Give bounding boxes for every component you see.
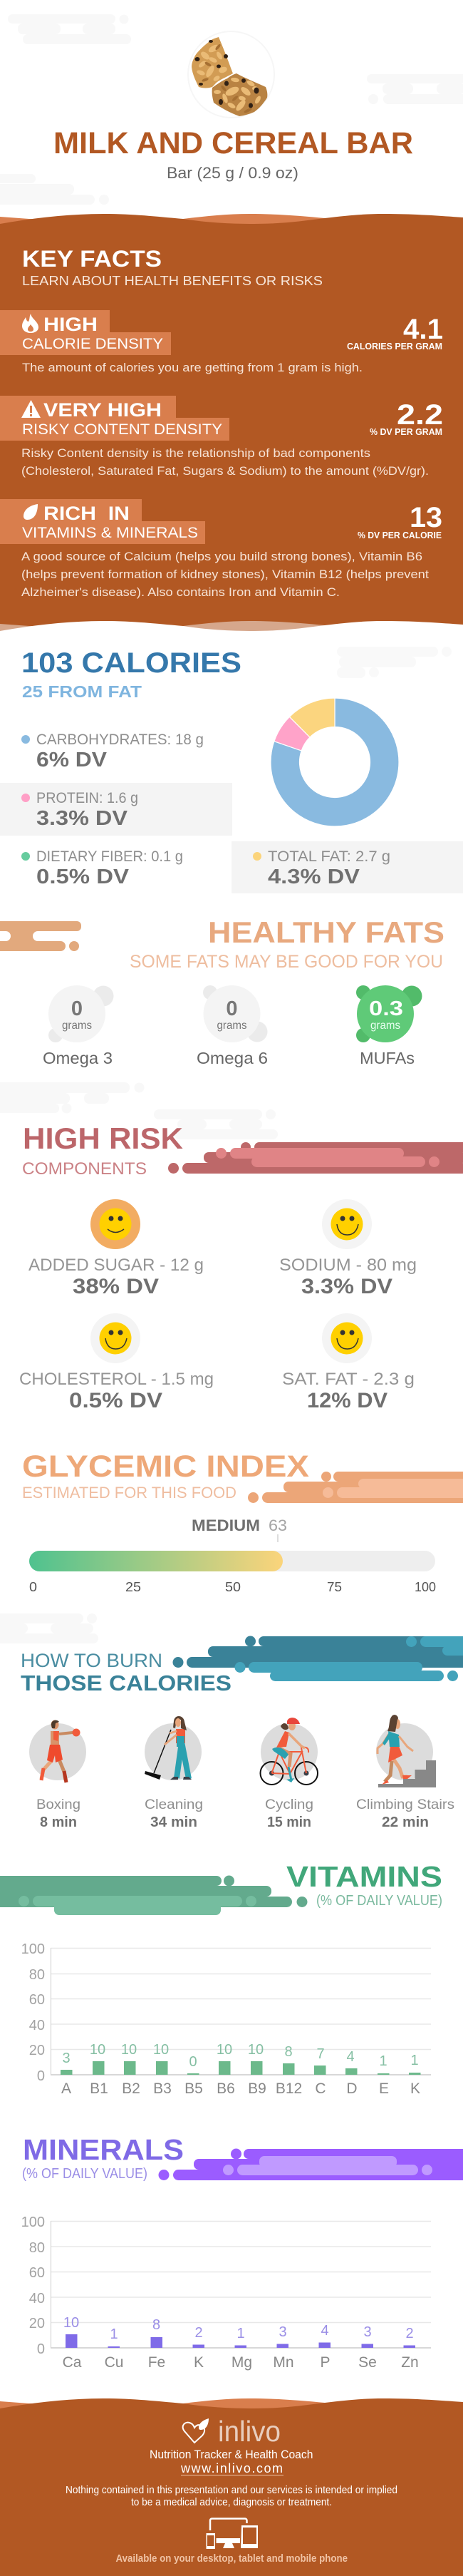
macro: dietary fiber xyxy=(21,848,183,888)
bar chart: vitamins: 60 xyxy=(29,1992,45,2008)
bar chart: vitamins: 0 xyxy=(37,2068,45,2084)
macro: dietary fiber: DIETARY FIBER: 0.1 g xyxy=(36,848,183,865)
serving size: Bar (25 g / 0.9 oz) xyxy=(167,164,298,182)
risk: sodium: 3.3% DV xyxy=(301,1275,392,1298)
heading: HIGH RISK xyxy=(23,1122,183,1155)
activity labels: Climbing Stairs xyxy=(356,1797,454,1812)
bar chart: minerals: 3 xyxy=(279,2324,287,2340)
bar chart: minerals: P xyxy=(320,2354,331,2371)
logo wordmark: inlivo xyxy=(218,2415,281,2448)
panel: healthy fats xyxy=(0,915,444,1067)
bar chart: minerals: Cu xyxy=(105,2354,123,2371)
heading line two: THOSE CALORIES xyxy=(21,1671,232,1695)
mufas: MUFAs xyxy=(360,1049,415,1067)
bar chart: minerals: 2 xyxy=(194,2325,203,2341)
risk: added sugar: 38% DV xyxy=(73,1275,159,1298)
risk: cholesterol: CHOLESTEROL - 1.5 mg xyxy=(19,1370,214,1389)
subheading: (% OF DAILY VALUE) xyxy=(22,2166,147,2182)
bar chart: minerals: 80 xyxy=(29,2240,45,2256)
subheading: ESTIMATED FOR THIS FOOD xyxy=(22,1484,236,1502)
subheading: (% OF DAILY VALUE) xyxy=(316,1893,442,1909)
bar chart: vitamins: 80 xyxy=(29,1967,45,1983)
bar chart: minerals: 1 xyxy=(236,2326,245,2341)
omega 3: grams xyxy=(62,1020,92,1032)
food image xyxy=(188,31,274,118)
bar chart: minerals: 20 xyxy=(29,2316,45,2331)
bar chart: vitamins: 100 xyxy=(21,1941,45,1957)
bar chart: vitamins: 10 xyxy=(121,2042,137,2058)
availability note: Available on your desktop, tablet and mobile phone xyxy=(115,2553,348,2565)
bar chart: vitamins: 10 xyxy=(248,2042,264,2058)
bar chart: vitamins: C xyxy=(315,2080,326,2097)
key facts subheading: LEARN ABOUT HEALTH BENEFITS OR RISKS xyxy=(22,274,323,288)
bar chart: vitamins: B12 xyxy=(276,2080,302,2097)
heading line one: HOW TO BURN xyxy=(21,1650,162,1671)
subheading: SOME FATS MAY BE GOOD FOR YOU xyxy=(130,952,443,972)
panel: calories xyxy=(0,647,463,893)
heading: GLYCEMIC INDEX xyxy=(22,1449,309,1484)
gauge bar xyxy=(29,1551,435,1571)
activity: cleaning xyxy=(145,1716,202,1780)
icon: leaf xyxy=(24,504,38,520)
risk: saturated fat: SAT. FAT - 2.3 g xyxy=(282,1370,415,1389)
bar chart: vitamins: 1 xyxy=(410,2053,419,2068)
bar chart: vitamins: E xyxy=(379,2080,389,2097)
omega 3 xyxy=(43,985,114,1067)
unit: calories per gram: CALORIES PER GRAM xyxy=(347,342,442,351)
bar chart: vitamins: 40 xyxy=(29,2018,45,2033)
macro: carbohydrates: CARBOHYDRATES: 18 g xyxy=(36,732,204,748)
bar chart: minerals: 40 xyxy=(29,2291,45,2306)
label: calorie density: CALORIE DENSITY xyxy=(22,336,163,352)
macro: protein: 3.3% DV xyxy=(36,807,128,830)
bar chart: vitamins: B5 xyxy=(184,2080,203,2097)
gauge label: MEDIUM xyxy=(192,1517,260,1534)
bar chart: minerals: Fe xyxy=(148,2354,165,2371)
bar chart: vitamins: B6 xyxy=(217,2080,235,2097)
activity durations: 34 min xyxy=(150,1815,197,1830)
macro: carbohydrates xyxy=(21,732,204,771)
label: rich in: RICH IN xyxy=(43,503,130,524)
heading: HEALTHY FATS xyxy=(208,915,444,949)
bar chart: vitamins: 7 xyxy=(316,2046,325,2062)
gauge scale: 100 xyxy=(415,1580,436,1594)
panel: how to burn xyxy=(21,1636,463,1830)
icon: flame xyxy=(22,314,38,333)
omega 3: 0 xyxy=(71,997,83,1020)
panel: glycemic index xyxy=(22,1449,463,1594)
gauge scale: 25 xyxy=(125,1580,141,1594)
risk: cholesterol xyxy=(19,1313,214,1412)
gauge scale xyxy=(29,1580,436,1594)
bar chart: vitamins: 1 xyxy=(379,2053,387,2069)
bar chart: vitamins: 3 xyxy=(62,2051,71,2066)
bar chart: vitamins: 10 xyxy=(90,2042,105,2058)
activity labels: Cycling xyxy=(265,1797,313,1812)
risk: added sugar xyxy=(28,1199,204,1298)
value: 13: 13 xyxy=(410,502,442,533)
activity: climbing stairs xyxy=(376,1715,436,1787)
omega 6: 0 xyxy=(226,997,238,1020)
omega 6 xyxy=(197,985,268,1067)
activity durations: 8 min xyxy=(40,1815,77,1830)
disclaimer xyxy=(66,2485,397,2508)
bar chart: minerals: Zn xyxy=(401,2354,419,2371)
description xyxy=(21,550,429,599)
risk: sodium xyxy=(279,1199,417,1298)
activity labels: Cleaning xyxy=(145,1797,203,1812)
bar chart: minerals: Mg xyxy=(232,2354,252,2371)
risk: saturated fat: 12% DV xyxy=(307,1389,387,1412)
bar chart: minerals: 8 xyxy=(152,2317,160,2333)
omega 3: Omega 3 xyxy=(43,1049,113,1067)
bar chart: vitamins: B1 xyxy=(90,2080,108,2097)
decorative bars xyxy=(0,1875,308,1915)
heading: MINERALS xyxy=(23,2133,184,2166)
bar chart: minerals: 100 xyxy=(21,2215,45,2230)
panel: key facts xyxy=(0,214,463,642)
macro: total fat xyxy=(232,841,463,893)
bar chart: minerals: Ca xyxy=(63,2354,82,2371)
value: 2.2: 2.2 xyxy=(397,399,443,431)
label: vitamins and minerals: VITAMINS & MINERALS xyxy=(22,525,198,541)
tagline: Nutrition Tracker & Health Coach xyxy=(150,2448,313,2461)
icon: warning triangle xyxy=(21,400,41,418)
description xyxy=(21,446,429,478)
gauge scale: 0 xyxy=(29,1580,37,1594)
bar chart: minerals xyxy=(21,2215,431,2371)
risk: added sugar: ADDED SUGAR - 12 g xyxy=(28,1256,204,1275)
gauge scale: 75 xyxy=(327,1580,342,1594)
bar chart: vitamins xyxy=(21,1941,431,2097)
bar chart: vitamins: 20 xyxy=(29,2043,45,2058)
activity labels xyxy=(36,1797,454,1812)
unit: % dv per calorie: % DV PER CALORIE xyxy=(358,530,442,540)
icon: devices xyxy=(207,2518,258,2549)
activity labels: Boxing xyxy=(36,1797,80,1812)
bar chart: vitamins: B2 xyxy=(122,2080,140,2097)
logo mark xyxy=(183,2418,209,2443)
activity: boxing xyxy=(29,1720,86,1782)
calories from fat: 25 FROM FAT xyxy=(22,682,142,701)
label: high: HIGH xyxy=(43,314,98,335)
mufas xyxy=(356,985,422,1067)
macro: total fat: 4.3% DV xyxy=(268,866,360,888)
panel: vitamins xyxy=(0,1860,442,2097)
bar chart: minerals: 10 xyxy=(63,2315,79,2331)
omega 6: grams xyxy=(217,1020,246,1032)
risk: saturated fat xyxy=(282,1313,415,1412)
fact: vitamins and minerals xyxy=(0,499,442,599)
macro: protein xyxy=(0,783,232,836)
bar chart: minerals: 3 xyxy=(363,2324,372,2340)
mufas: 0.3 xyxy=(369,997,403,1020)
website link: www.inlivo.com xyxy=(180,2461,283,2475)
description: Alzheimer's disease). Also contains Iron and Vitamin C. xyxy=(21,585,340,599)
bar chart: vitamins: B9 xyxy=(248,2080,266,2097)
mufas: grams xyxy=(370,1020,400,1032)
bar chart: vitamins: 10 xyxy=(217,2042,232,2058)
macro: total fat: TOTAL FAT: 2.7 g xyxy=(268,848,390,865)
bar chart: vitamins: A xyxy=(61,2080,71,2097)
bar chart: vitamins: 10 xyxy=(153,2042,169,2058)
panel: high risk components xyxy=(19,1122,463,1412)
description: A good source of Calcium (helps you build strong bones), Vitamin B6 xyxy=(21,550,422,563)
donut chart xyxy=(271,698,399,826)
decorative bars xyxy=(168,1142,463,1174)
bar chart: minerals: Mn xyxy=(273,2354,294,2371)
calories heading: 103 CALORIES xyxy=(21,647,241,679)
bar chart: minerals: 2 xyxy=(405,2326,414,2341)
bar chart: minerals: 4 xyxy=(321,2323,329,2339)
heading: VITAMINS xyxy=(286,1860,442,1893)
activity durations xyxy=(40,1815,429,1830)
decorative bars xyxy=(0,921,81,951)
title: MILK AND CEREAL BAR xyxy=(53,126,413,160)
macro: dietary fiber: 0.5% DV xyxy=(36,866,130,888)
label: very high: VERY HIGH xyxy=(43,399,162,421)
key facts heading: KEY FACTS xyxy=(22,246,162,272)
activity durations: 22 min xyxy=(382,1815,429,1830)
macro: protein: PROTEIN: 1.6 g xyxy=(36,790,138,806)
bar chart: minerals: 60 xyxy=(29,2265,45,2281)
description: Risky Content density is the relationship of bad components xyxy=(21,446,370,460)
unit: % dv per gram: % DV PER GRAM xyxy=(370,427,442,437)
panel: minerals xyxy=(21,2133,463,2371)
description: (helps prevent formation of kidney stones), Vitamin B12 (helps prevent xyxy=(21,568,429,581)
activity durations: 15 min xyxy=(267,1815,311,1830)
disclaimer: to be a medical advice, diagnosis or treatment. xyxy=(131,2497,332,2508)
disclaimer: Nothing contained in this presentation and our services is intended or implied xyxy=(66,2485,397,2496)
value: 4.1: 4.1 xyxy=(403,314,443,345)
label: risky content density: RISKY CONTENT DENSITY xyxy=(22,421,222,438)
macro: carbohydrates: 6% DV xyxy=(36,749,108,771)
description: The amount of calories you are getting from 1 gram is high. xyxy=(22,361,363,374)
bar chart: vitamins: B3 xyxy=(153,2080,172,2097)
bar chart: minerals: Se xyxy=(358,2354,377,2371)
activity: cycling xyxy=(261,1718,318,1785)
fact: calorie density xyxy=(0,310,443,374)
risk: sodium: SODIUM - 80 mg xyxy=(279,1256,417,1275)
fact: risky content density xyxy=(0,396,443,478)
bar chart: minerals: 1 xyxy=(110,2326,118,2342)
bar chart: vitamins: 4 xyxy=(346,2049,355,2065)
omega 6: Omega 6 xyxy=(197,1049,268,1067)
gauge scale: 50 xyxy=(225,1580,241,1594)
bar chart: vitamins: 0 xyxy=(189,2054,197,2070)
bar chart: vitamins: 8 xyxy=(284,2044,293,2060)
bar chart: vitamins: K xyxy=(410,2080,420,2097)
subheading: COMPONENTS xyxy=(22,1159,147,1179)
decorative bars xyxy=(248,1472,463,1503)
bar chart: vitamins: D xyxy=(346,2080,358,2097)
bar chart: minerals: 0 xyxy=(37,2341,45,2357)
bar chart: minerals: K xyxy=(194,2354,204,2371)
decorative bars xyxy=(158,2149,463,2180)
description: (Cholesterol, Saturated Fat, Sugars & Sodium) to the amount (%DV/gr). xyxy=(21,464,429,478)
panel: footer xyxy=(0,2398,463,2576)
risk: cholesterol: 0.5% DV xyxy=(69,1389,162,1412)
gauge value: 63 xyxy=(269,1517,287,1534)
decorative bars xyxy=(172,1636,463,1681)
